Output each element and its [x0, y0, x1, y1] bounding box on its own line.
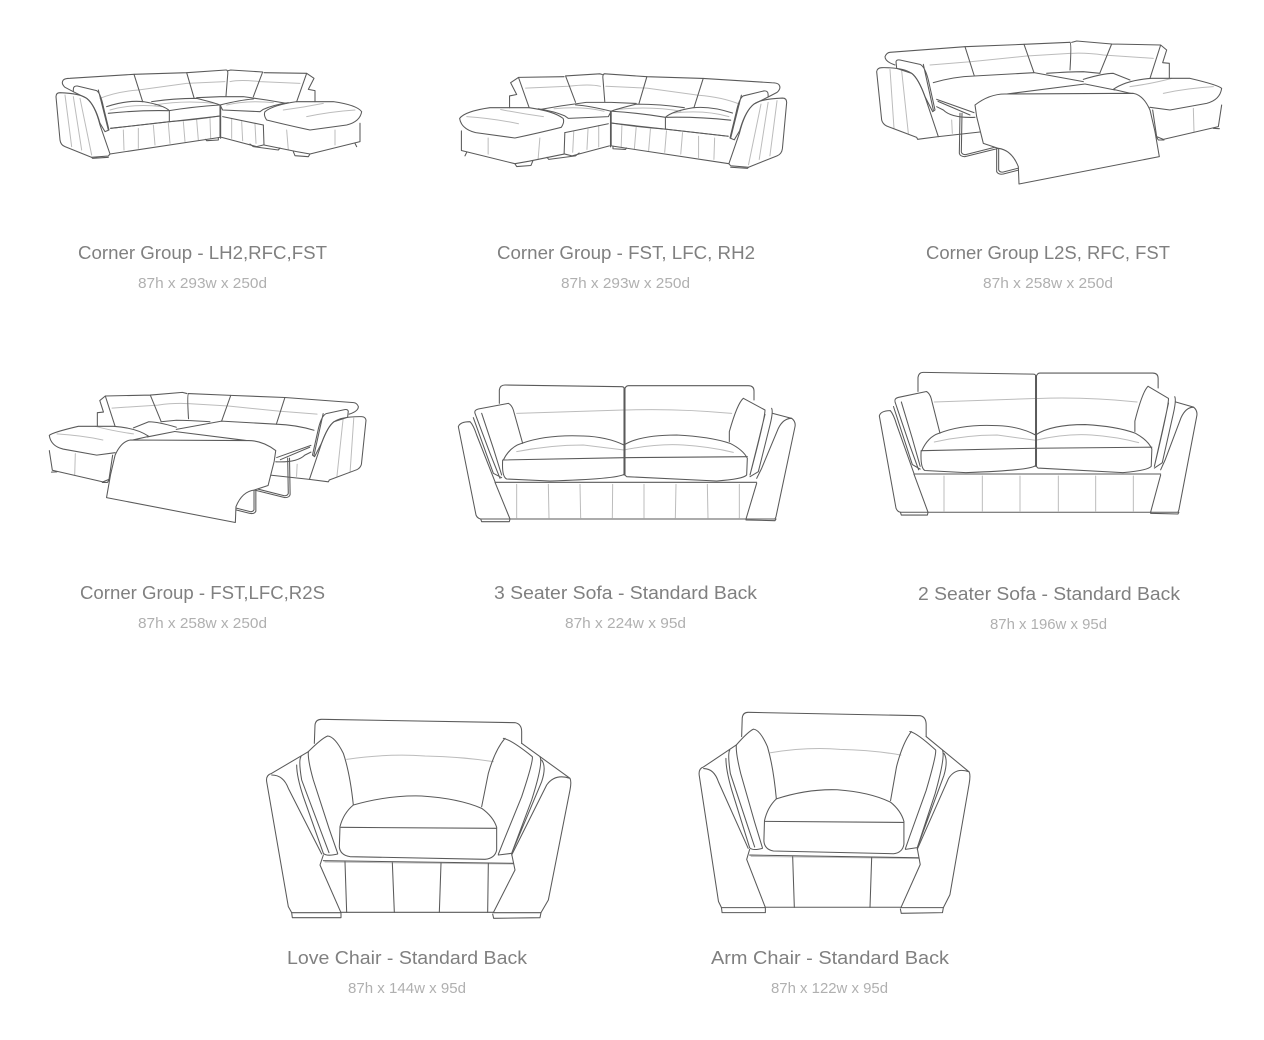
dimensions: 87h x 293w x 250d — [138, 275, 267, 292]
dimensions: 87h x 224w x 95d — [565, 615, 686, 632]
dimensions: 87h x 196w x 95d — [990, 616, 1107, 633]
dimensions: 87h x 122w x 95d — [771, 980, 888, 997]
illustration: 3 seater sofa — [458, 385, 795, 522]
heading: Love Chair - Standard Back — [287, 948, 528, 968]
illustration: corner sofa bed opened, left chaise — [49, 392, 366, 522]
panel: corner group FST LFC RH2 — [460, 74, 787, 292]
illustration: 2 seater sofa — [879, 372, 1197, 515]
dimensions: 87h x 258w x 250d — [138, 615, 267, 632]
illustration: corner sofa with left chaise — [460, 74, 787, 168]
illustration: love chair — [267, 719, 571, 918]
dimensions: 87h x 144w x 95d — [348, 980, 466, 997]
heading: Corner Group L2S, RFC, FST — [926, 243, 1170, 263]
illustration: corner sofa with right chaise — [56, 70, 362, 158]
panel: corner group L2S RFC FST — [877, 41, 1222, 292]
heading: 2 Seater Sofa - Standard Back — [918, 584, 1181, 604]
panel: 3 seater sofa — [458, 385, 795, 632]
panel: corner group FST LFC R2S — [49, 392, 366, 632]
heading: Corner Group - FST,LFC,R2S — [80, 583, 325, 603]
panel: love chair — [267, 719, 571, 997]
panel: corner group LH2 RFC FST — [56, 70, 362, 292]
panel: 2 seater sofa — [879, 372, 1197, 633]
heading: 3 Seater Sofa - Standard Back — [494, 583, 758, 603]
illustration: corner sofa bed opened, right chaise — [877, 41, 1222, 184]
heading: Corner Group - LH2,RFC,FST — [78, 243, 327, 263]
panel: arm chair — [699, 712, 970, 997]
dimensions: 87h x 258w x 250d — [983, 275, 1113, 292]
dimensions: 87h x 293w x 250d — [561, 275, 690, 292]
illustration: arm chair — [699, 712, 970, 913]
heading: Arm Chair - Standard Back — [711, 948, 950, 968]
heading: Corner Group - FST, LFC, RH2 — [497, 243, 755, 263]
